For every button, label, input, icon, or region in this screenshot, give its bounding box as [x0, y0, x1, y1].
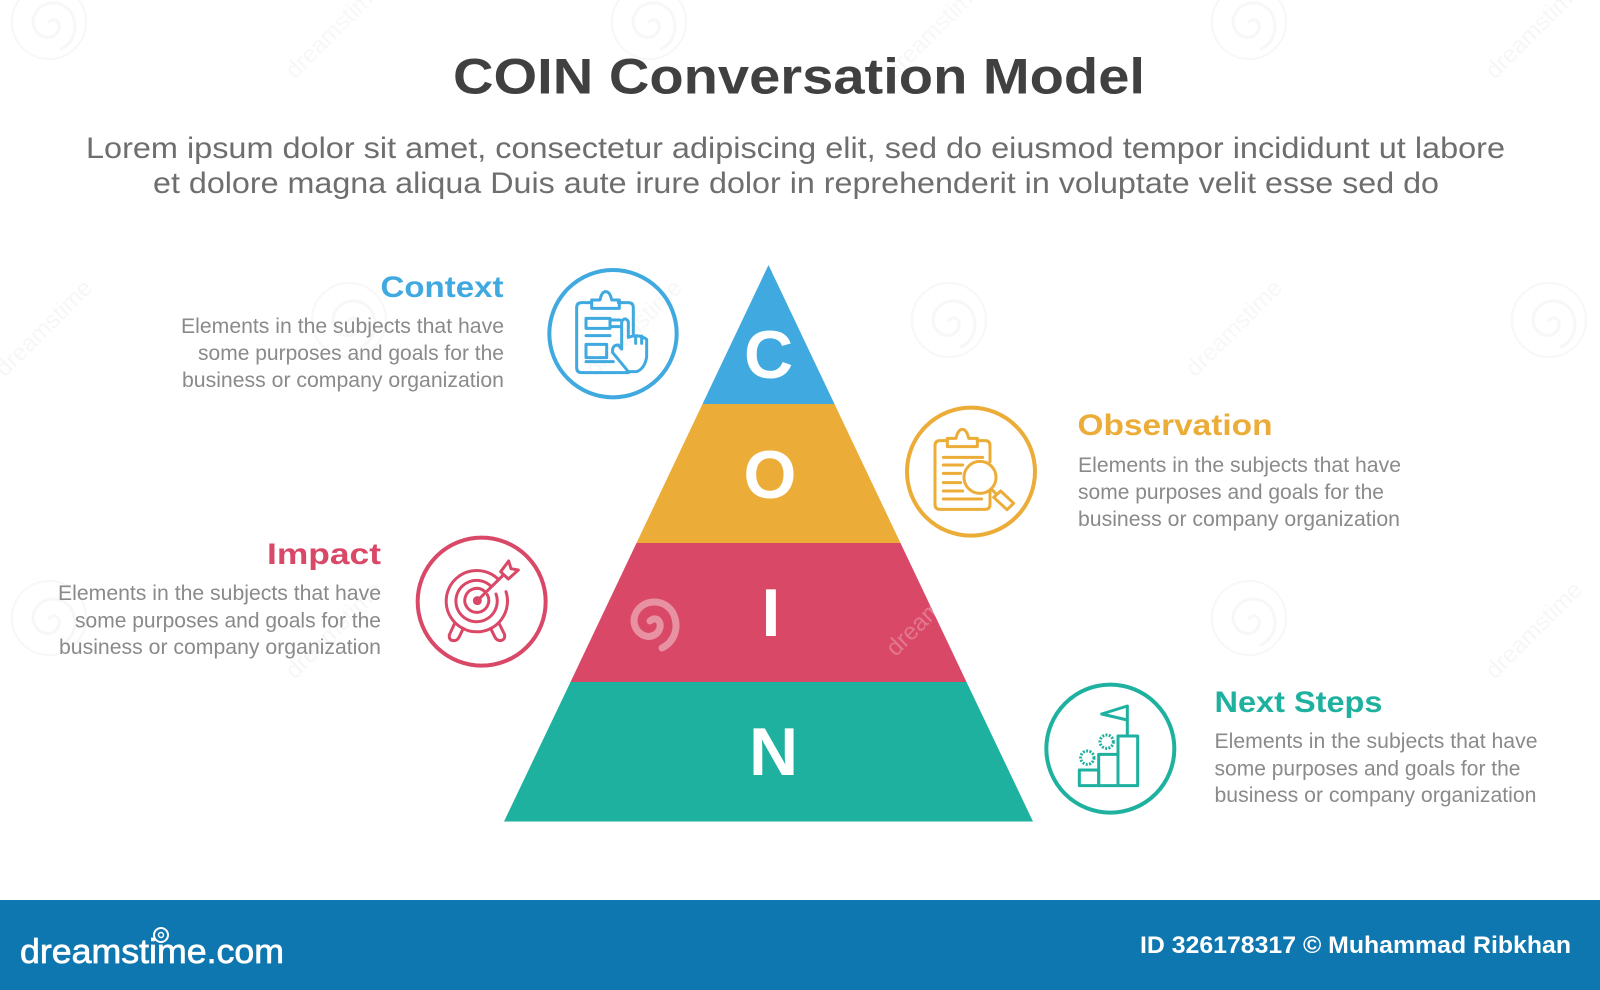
text: dreamstime: [1480, 576, 1588, 684]
text: dreamstime: [280, 576, 388, 684]
text: dreamstime: [580, 274, 688, 382]
text block: Observation: [1078, 453, 1401, 531]
icon: steps with flag: [1046, 685, 1174, 813]
text block: Context: some purposes and goals for the: [198, 341, 504, 365]
text block: Impact: Elements in the subjects that have: [58, 581, 381, 605]
pyramid layer: I: dreamstime: [881, 554, 989, 662]
pyramid layer: N: [504, 682, 1033, 822]
subtitle: [86, 132, 1505, 200]
text block: Context: business or company organization: [182, 368, 504, 392]
text: dreamstime: [1180, 274, 1288, 382]
text block: Context: [181, 314, 504, 392]
heading: Impact: Impact: [267, 538, 381, 571]
icon: target with arrow: [418, 538, 546, 666]
text block: Context: Elements in the subjects that have: [181, 314, 504, 338]
text block: Observation: Elements in the subjects that have: [1078, 453, 1401, 477]
pyramid layer: C: C: [744, 317, 793, 393]
subtitle: Lorem ipsum dolor sit amet, consectetur adipiscing elit, sed do eiusmod tempor incididunt ut labore: [86, 132, 1505, 165]
text block: Impact: business or company organization: [59, 635, 381, 659]
text block: Impact: [58, 581, 381, 659]
pyramid chart: [504, 265, 1033, 822]
heading: Observation: Observation: [1078, 409, 1272, 442]
text block: Next Steps: business or company organization: [1214, 783, 1536, 807]
item: Impact: [58, 538, 546, 666]
icon: clipboard with hand: [549, 270, 677, 397]
text block: Next Steps: Elements in the subjects that have: [1214, 729, 1538, 753]
subtitle: et dolore magna aliqua Duis aute irure dolor in reprehenderit in voluptate velit esse sed do: [153, 167, 1439, 200]
title: COIN Conversation Model: [453, 48, 1145, 104]
heading: Context: Context: [380, 271, 504, 304]
text block: Observation: business or company organization: [1078, 507, 1400, 531]
pyramid layer: I: I: [762, 575, 780, 651]
item: Observation: [907, 408, 1401, 536]
pyramid layer: I: [570, 543, 989, 682]
icon: clipboard with magnifier: [907, 408, 1035, 536]
text block: Next Steps: [1214, 729, 1538, 807]
pyramid layer: C: [702, 265, 834, 404]
logo: dreamstime: dreamstime.com: [20, 933, 284, 971]
text block: Next Steps: some purposes and goals for the: [1214, 756, 1520, 780]
image id and author: ID 326178317 © Muhammad Ribkhan: [1140, 932, 1571, 959]
text block: Impact: some purposes and goals for the: [75, 608, 381, 632]
text block: Observation: some purposes and goals for the: [1078, 480, 1384, 504]
pyramid layer: O: O: [744, 437, 796, 513]
pyramid layer: O: [636, 404, 900, 543]
item: Context: [181, 270, 677, 397]
footer band: [0, 900, 1600, 990]
heading: Next Steps: Next Steps: [1214, 686, 1382, 719]
item: Next Steps: [1046, 685, 1538, 813]
pyramid layer: N: N: [749, 714, 798, 790]
